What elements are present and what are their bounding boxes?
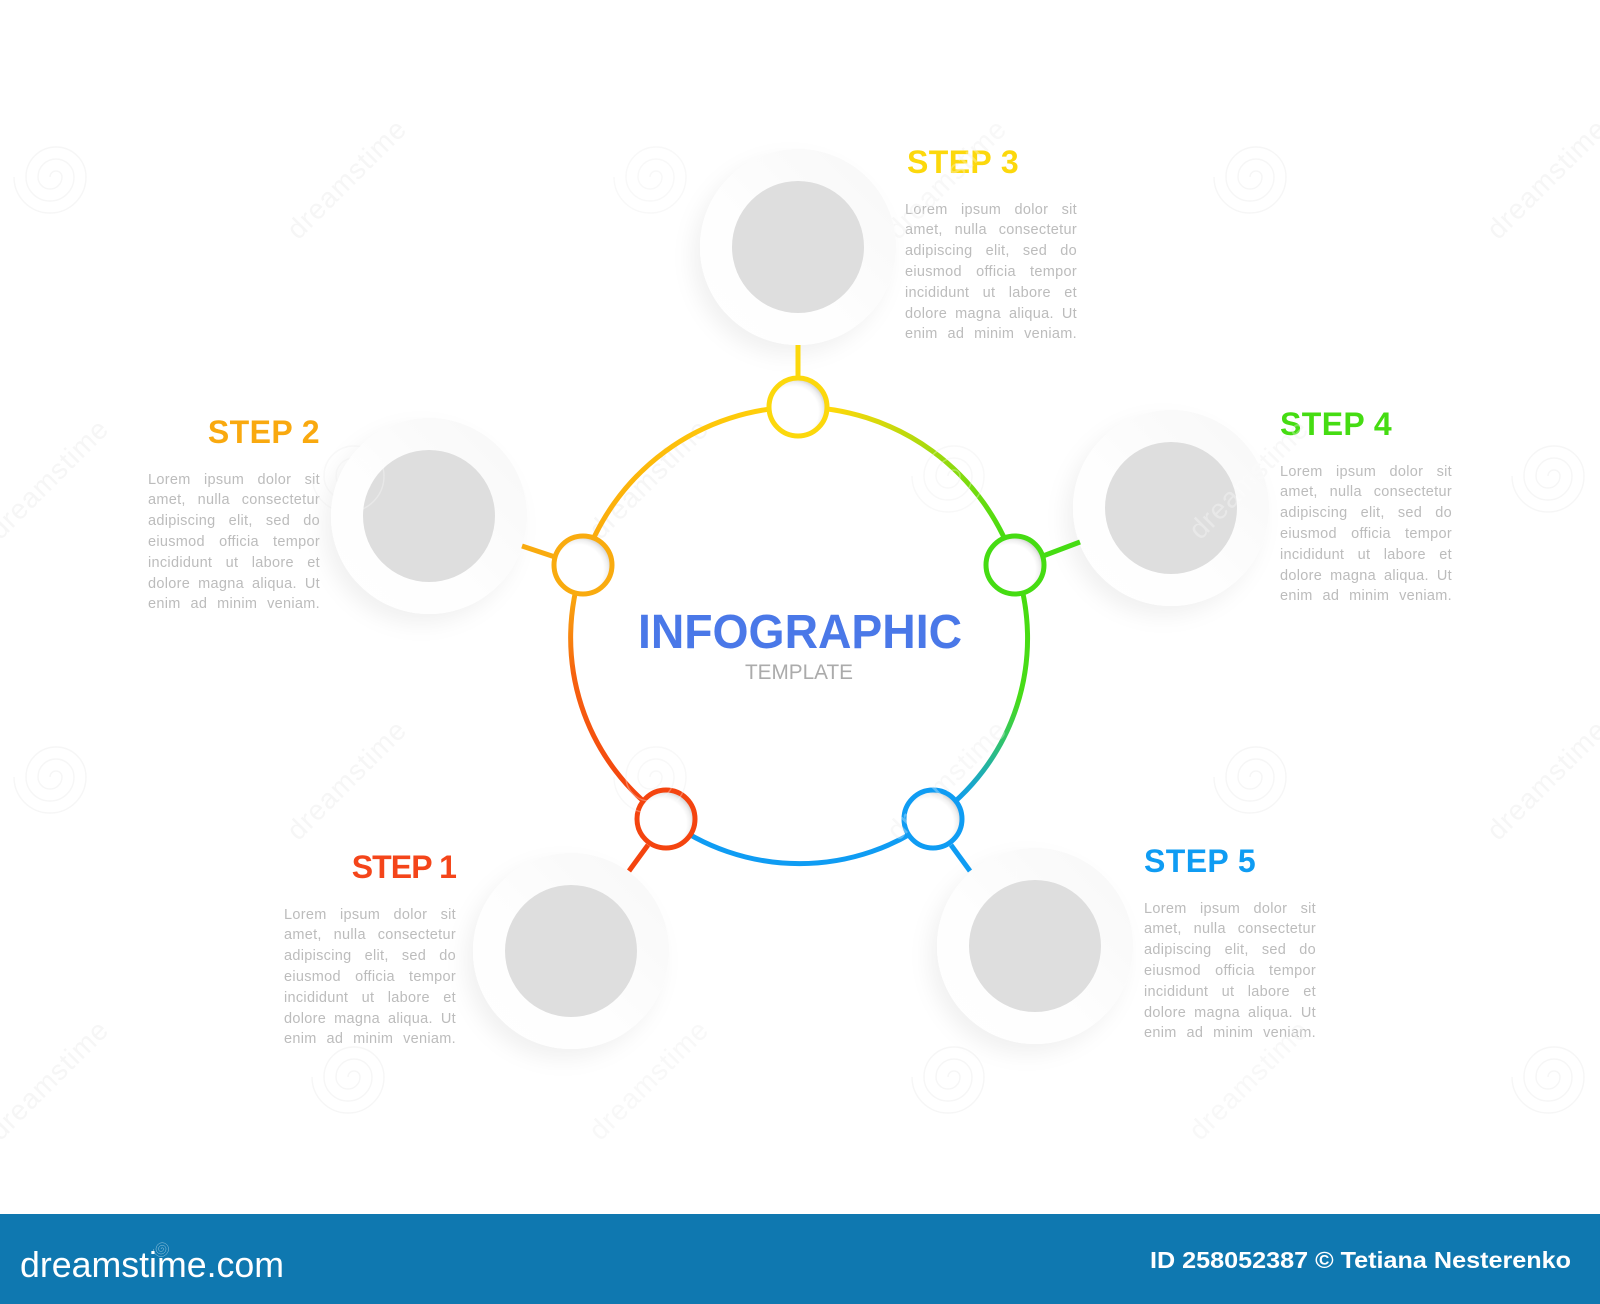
text block: step 4: incididunt ut labore et (1280, 547, 1452, 563)
connector: step 4 (1043, 542, 1080, 556)
text block: step 2: amet, nulla consectetur (148, 492, 320, 508)
text block: step 3: dolore magna aliqua. Ut (905, 306, 1077, 322)
step 2 disc (331, 418, 527, 614)
text block: step 4: Lorem ipsum dolor sit (1280, 464, 1452, 480)
text block: step 5: eiusmod officia tempor (1144, 963, 1316, 979)
text block: step 2: enim ad minim veniam. (148, 596, 320, 612)
text block: step 2: Lorem ipsum dolor sit (148, 472, 320, 488)
connector: step 5 (951, 845, 970, 871)
text block: step 5: incididunt ut labore et (1144, 984, 1316, 1000)
text block: step 1: STEP 1 (352, 849, 456, 885)
node: step 5 (904, 790, 962, 848)
subtitle: TEMPLATE (745, 661, 853, 684)
watermark overlay on graphics: dreamstime (881, 114, 1012, 245)
text block: step 4: adipiscing elit, sed do (1280, 505, 1452, 521)
text block: step 3: adipiscing elit, sed do (905, 243, 1077, 259)
node: step 3 (769, 378, 827, 436)
text block: step 1: incididunt ut labore et (284, 990, 456, 1006)
text block: step 2: dolore magna aliqua. Ut (148, 576, 320, 592)
background watermark pattern: dreamstime (1183, 414, 1314, 545)
text block: step 5: enim ad minim veniam. (1144, 1025, 1316, 1041)
watermark overlay on graphics: dreamstime (583, 1015, 714, 1146)
node: step 1 (637, 790, 695, 848)
text block: step 3: incididunt ut labore et (905, 285, 1077, 301)
text block: step 5: adipiscing elit, sed do (1144, 942, 1316, 958)
text block: step 1: adipiscing elit, sed do (284, 948, 456, 964)
background watermark pattern: dreamstime (881, 715, 1012, 846)
background watermark pattern: dreamstime (583, 1015, 714, 1146)
text block: step 4: STEP 4 (1280, 406, 1392, 442)
background watermark pattern: dreamstime (881, 114, 1012, 245)
footer credit: ID 258052387 © Tetiana Nesterenko (1150, 1247, 1571, 1273)
text block: step 4: amet, nulla consectetur (1280, 484, 1452, 500)
connector: step 3 (796, 345, 800, 378)
text block: step 2: eiusmod officia tempor (148, 534, 320, 550)
title: INFOGRAPHIC (638, 606, 962, 659)
text block: step 1: amet, nulla consectetur (284, 927, 456, 943)
connector: step 2 (522, 546, 555, 557)
text block: step 3: amet, nulla consectetur (905, 222, 1077, 238)
text block: step 2: adipiscing elit, sed do (148, 513, 320, 529)
step 1 disc (473, 853, 669, 1049)
background watermark pattern: dreamstime (1183, 1015, 1314, 1146)
text block: step 3 (905, 144, 1077, 342)
node: step 2 (554, 536, 612, 594)
background watermark pattern: dreamstime (583, 414, 714, 545)
text block: step 1: Lorem ipsum dolor sit (284, 907, 456, 923)
watermark overlay on graphics: dreamstime (881, 715, 1012, 846)
footer logo: dreamstime.com (20, 1244, 284, 1285)
step 5 disc (937, 848, 1133, 1044)
text block: step 1 (284, 849, 456, 1047)
text block: step 5: STEP 5 (1144, 843, 1256, 879)
step 3 disc (700, 149, 896, 345)
background watermark pattern: dreamstime (281, 715, 412, 846)
text block: step 2: STEP 2 (208, 414, 320, 450)
gradient ring (571, 407, 1028, 864)
connector: step 1 (629, 845, 648, 871)
text block: step 4: eiusmod officia tempor (1280, 526, 1452, 542)
text block: step 1: eiusmod officia tempor (284, 969, 456, 985)
text block: step 4 (1280, 406, 1452, 604)
text block: step 3: enim ad minim veniam. (905, 326, 1077, 342)
text block: step 2 (148, 414, 320, 612)
text block: step 3: eiusmod officia tempor (905, 264, 1077, 280)
text block: step 4: dolore magna aliqua. Ut (1280, 568, 1452, 584)
background watermark pattern: dreamstime (281, 114, 412, 245)
text block: step 5 (1144, 843, 1316, 1041)
text block: step 4: enim ad minim veniam. (1280, 588, 1452, 604)
text block: step 1: dolore magna aliqua. Ut (284, 1011, 456, 1027)
watermark overlay on graphics: dreamstime (1183, 1015, 1314, 1146)
text block: step 3: STEP 3 (907, 144, 1019, 180)
text block: step 5: amet, nulla consectetur (1144, 921, 1316, 937)
node: step 4 (986, 536, 1044, 594)
text block: step 2: incididunt ut labore et (148, 555, 320, 571)
text block: step 3: Lorem ipsum dolor sit (905, 202, 1077, 218)
step 4 disc (1073, 410, 1269, 606)
watermark overlay on graphics: dreamstime (1183, 414, 1314, 545)
text block: step 1: enim ad minim veniam. (284, 1031, 456, 1047)
text block: step 5: dolore magna aliqua. Ut (1144, 1005, 1316, 1021)
text block: step 5: Lorem ipsum dolor sit (1144, 901, 1316, 917)
